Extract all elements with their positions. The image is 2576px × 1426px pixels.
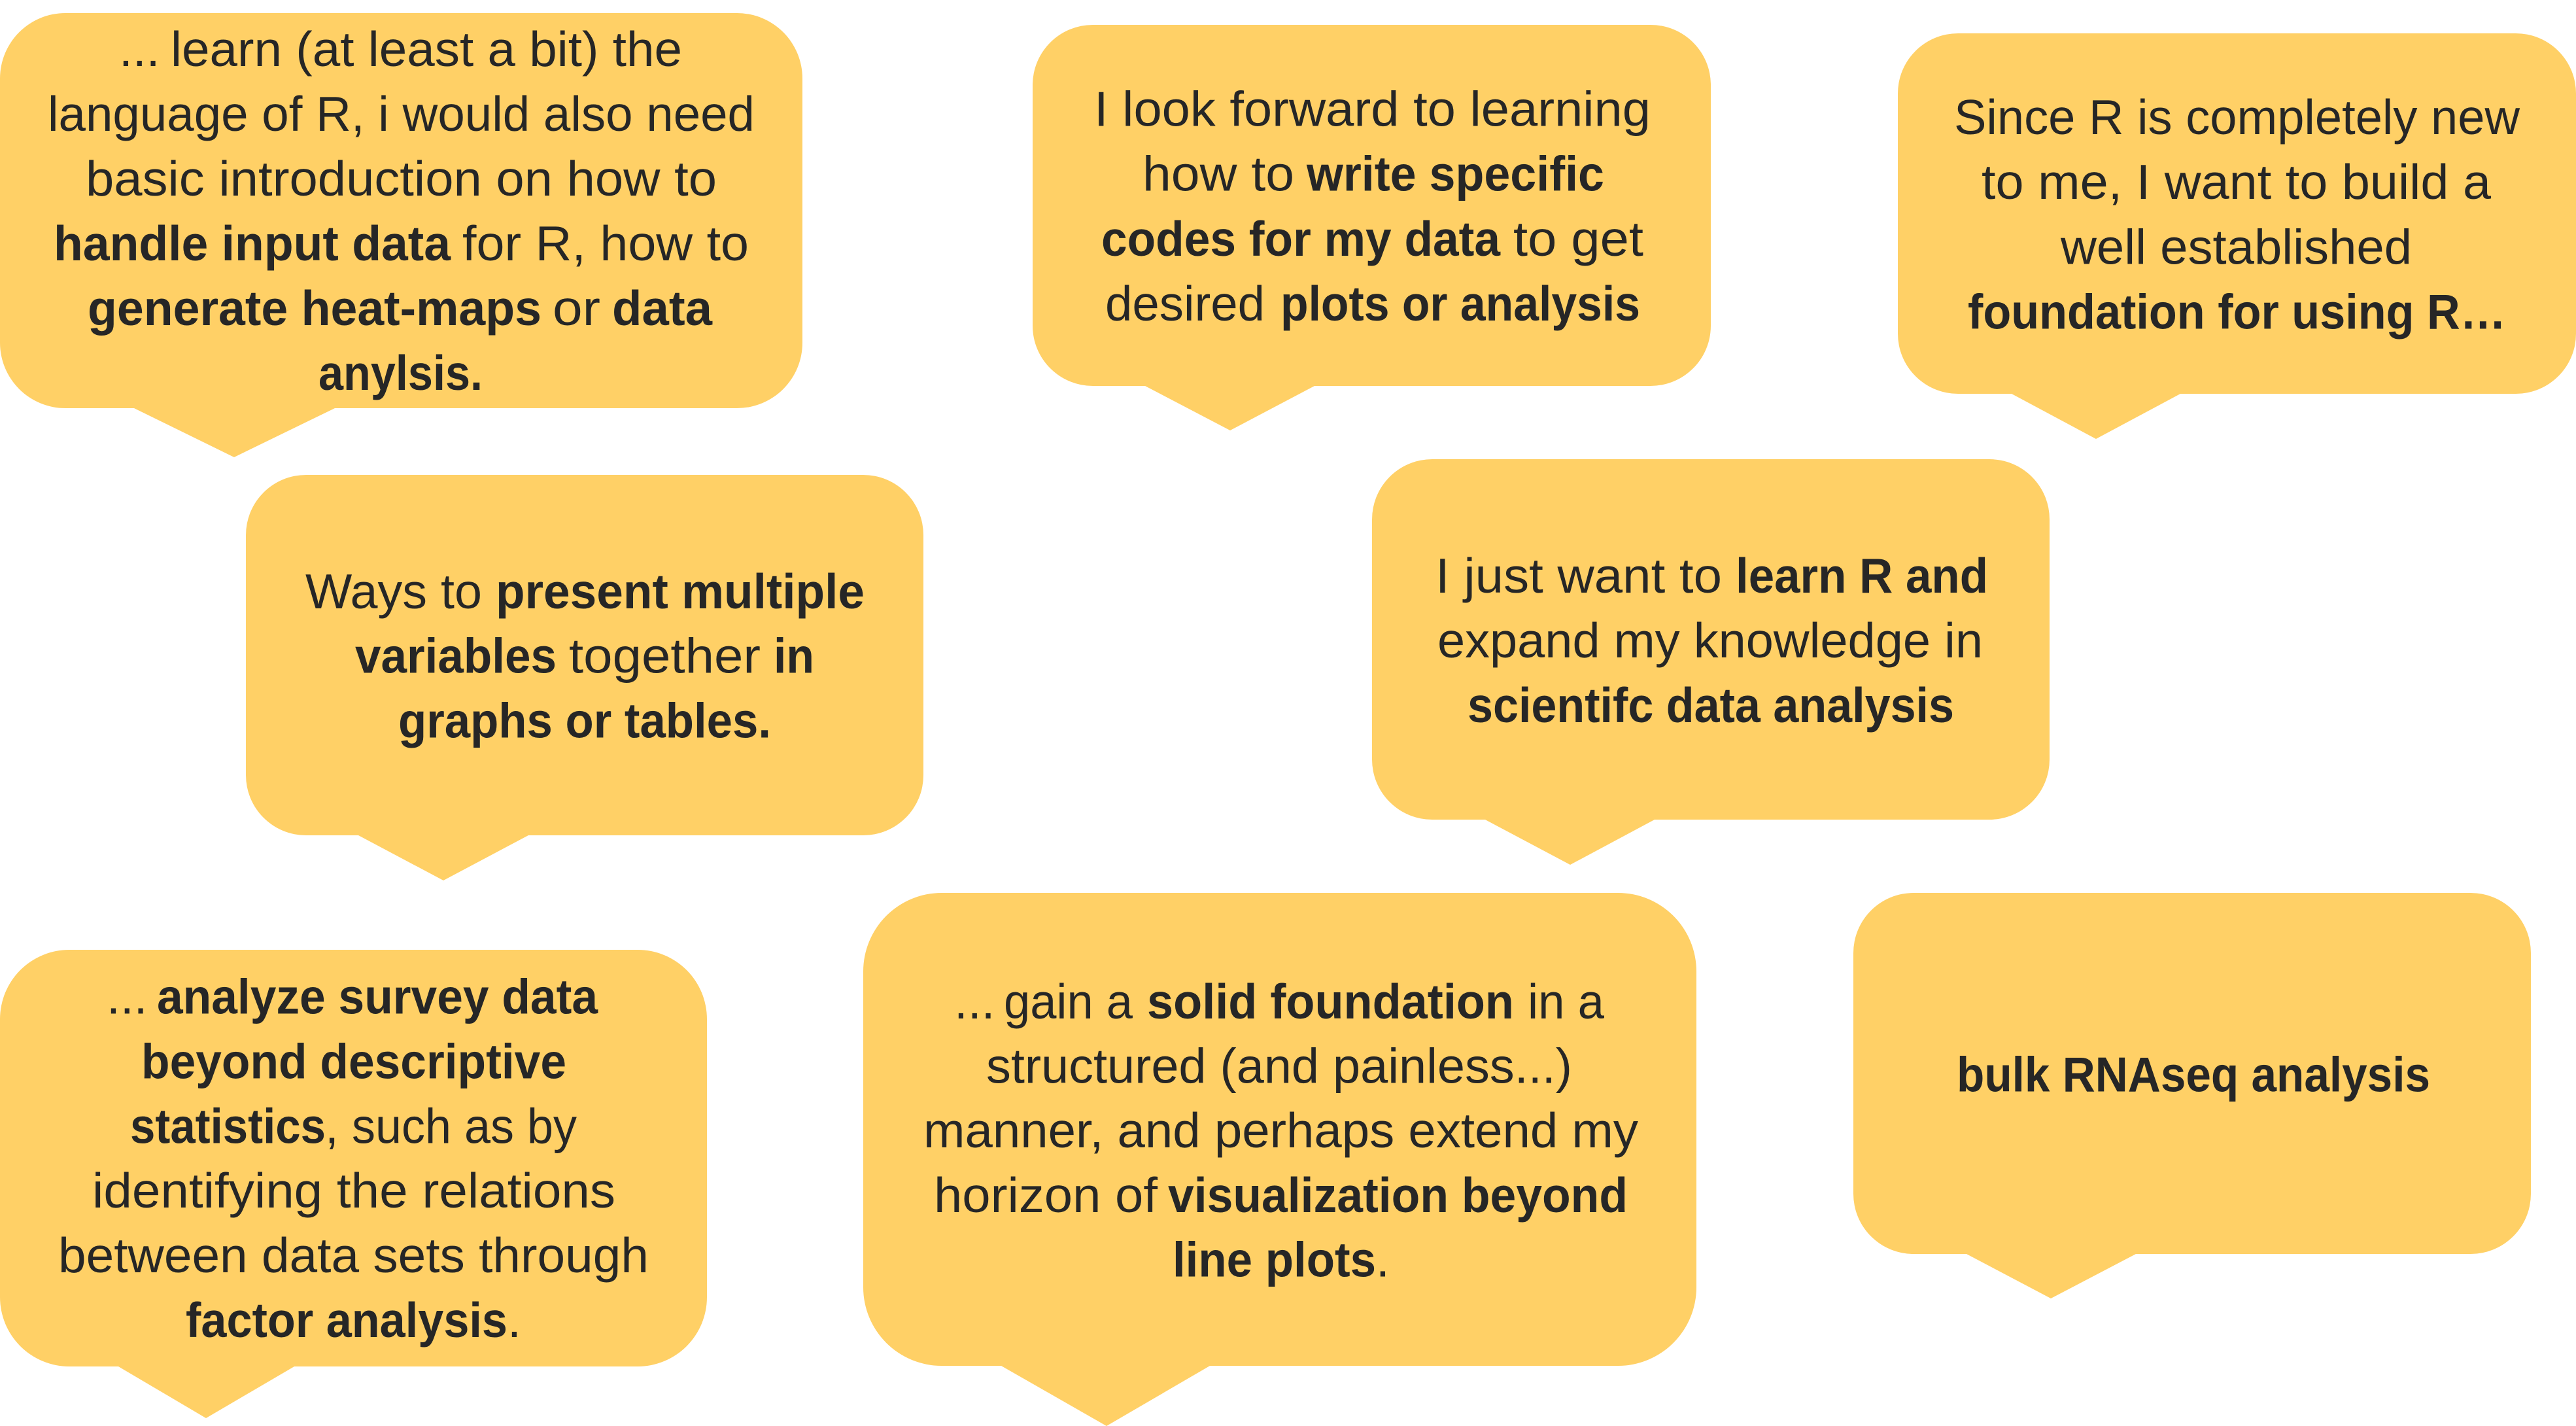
quote text: to me, I want to build a: [1982, 154, 2491, 209]
quote text: solid foundation: [1147, 974, 1514, 1029]
quote text: horizon of: [934, 1168, 1158, 1223]
bubble shape: [1898, 33, 2576, 439]
quote text: [1094, 81, 1651, 331]
bubble shape: [1372, 459, 2050, 865]
quote text: well established: [2060, 220, 2412, 275]
quote text: structured (and painless...): [986, 1039, 1572, 1094]
quote text: how to: [1142, 147, 1294, 201]
quote text: such as by: [352, 1099, 577, 1154]
quote text: [1435, 548, 1988, 733]
quote text: [923, 974, 1639, 1287]
quote text: visualization beyond: [1168, 1168, 1628, 1223]
quote text: desired: [1105, 276, 1265, 331]
quote text: ...: [119, 22, 160, 77]
quote text: statistics: [130, 1099, 326, 1154]
quote text: ,: [325, 1099, 339, 1154]
quote text: [305, 564, 865, 748]
quote text: graphs or tables.: [398, 693, 771, 748]
bubble shape: [0, 13, 802, 457]
bubble shape: [1853, 893, 2531, 1298]
quote text: learn (at least a bit) the: [171, 22, 682, 77]
quote text: Since R is completely new: [1954, 90, 2520, 145]
quote text: I look forward to learning: [1094, 81, 1651, 136]
quote text: [48, 22, 755, 400]
quote text: generate heat-maps: [88, 281, 541, 336]
quote text: .: [1376, 1232, 1390, 1287]
quote text: [1954, 90, 2520, 339]
speech bubble: foundation for using R: [1898, 33, 2576, 439]
speech bubble: present multiple variables: [246, 475, 923, 880]
quote text: line plots: [1173, 1232, 1376, 1287]
quote text: anylsis.: [318, 345, 483, 400]
quote text: expand my knowledge in: [1437, 613, 1983, 668]
speech bubble: learn the language of R: [0, 13, 802, 457]
quote text: learn R and: [1736, 548, 1988, 603]
quote text: handle input data: [54, 216, 451, 271]
quote text: variables: [355, 628, 557, 683]
quote text: for R, how to: [462, 216, 749, 271]
quote text: or: [553, 281, 600, 336]
quote text: bulk RNAseq analysis: [1957, 1047, 2430, 1102]
quote text: gain a: [1004, 974, 1133, 1029]
quote text: in: [774, 628, 814, 683]
quote text: basic introduction on how to: [86, 151, 717, 206]
quote text: I just want to: [1435, 548, 1722, 603]
quote text: .: [507, 1293, 521, 1348]
quote text: Ways to: [305, 564, 482, 619]
quote text: manner, and perhaps extend my: [923, 1103, 1639, 1158]
quote text: in a: [1528, 974, 1604, 1029]
speech bubble: gain a solid foundation: [863, 893, 1696, 1426]
quote text: present multiple: [496, 564, 865, 619]
quote text: together: [569, 628, 761, 683]
quote text: write specific: [1306, 147, 1604, 201]
quote text: plots or analysis: [1280, 276, 1640, 331]
speech bubble: write specific codes: [1033, 25, 1711, 430]
bubble shape: [246, 475, 923, 880]
quote text: analyze survey data: [157, 969, 598, 1024]
quote text: foundation for using R…: [1968, 284, 2506, 339]
quote text: codes for my data: [1101, 211, 1501, 266]
quote text: scientifc data analysis: [1468, 678, 1954, 733]
quote text: between data sets through: [58, 1228, 649, 1283]
speech bubble: learn R and expand knowledge: [1372, 459, 2050, 865]
bubble shape: [863, 893, 1696, 1426]
quote text: [58, 969, 649, 1348]
quote text: ...: [107, 969, 148, 1024]
quote text: data: [612, 281, 713, 336]
quote text: beyond descriptive: [141, 1034, 566, 1088]
quote text: ...: [954, 974, 995, 1029]
bubble shape: [0, 950, 707, 1418]
quote text: identifying the relations: [92, 1163, 615, 1218]
speech bubble: analyze survey data: [0, 950, 707, 1418]
quote text: factor analysis: [186, 1293, 507, 1348]
bubble shape: [1033, 25, 1711, 430]
quote text: language of R, i would also need: [48, 86, 755, 141]
quote text: to get: [1513, 211, 1643, 266]
speech bubble: bulk RNAseq analysis: [1853, 893, 2531, 1298]
